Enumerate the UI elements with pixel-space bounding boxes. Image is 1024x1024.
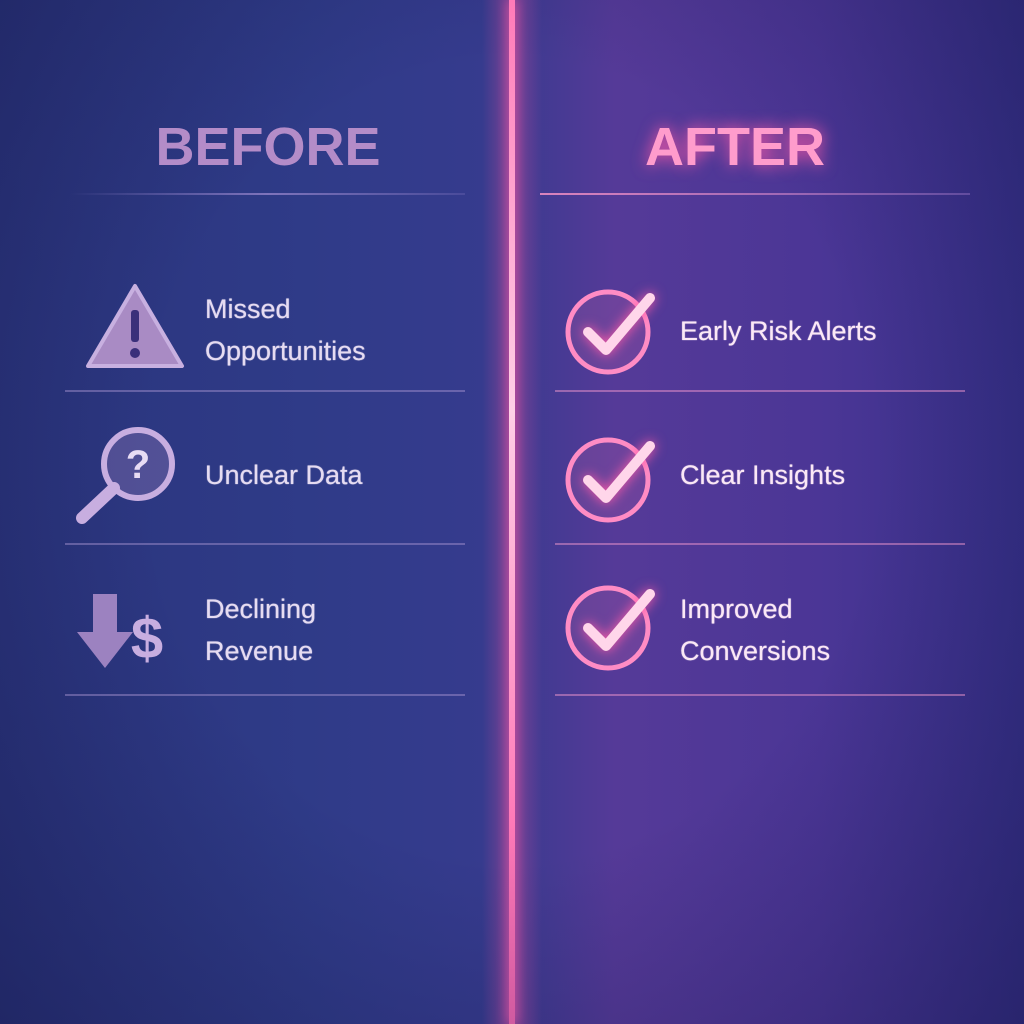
text: declining revenue: Revenue	[205, 636, 313, 666]
text: declining revenue: Declining	[205, 594, 316, 624]
center glowing divider	[482, 0, 542, 1024]
icon: declining dollar	[77, 594, 163, 671]
text: clear insights: Clear Insights	[680, 460, 845, 490]
icon: magnifier question	[76, 427, 175, 524]
text: early risk alerts: Early Risk Alerts	[680, 316, 877, 346]
text: missed opportunities: Missed	[205, 294, 291, 324]
panel: after list	[555, 286, 965, 696]
heading: after: AFTER	[645, 117, 825, 177]
text: unclear data: Unclear Data	[205, 460, 363, 490]
icon: magnifier question: ?	[126, 443, 150, 487]
text: missed opportunities: Opportunities	[205, 336, 366, 366]
heading: before: BEFORE	[155, 117, 381, 177]
icon: check 1	[566, 286, 662, 374]
text: improved conversions: Conversions	[680, 636, 830, 666]
text: declining revenue	[205, 594, 316, 666]
icon: declining dollar: $	[131, 606, 163, 671]
icon: check 3	[566, 582, 662, 670]
icon: check 2	[566, 434, 662, 522]
panel: before list	[65, 284, 465, 696]
icon: warning	[86, 284, 184, 368]
text: improved conversions	[680, 594, 830, 666]
text: missed opportunities	[205, 294, 366, 366]
text: improved conversions: Improved	[680, 594, 793, 624]
